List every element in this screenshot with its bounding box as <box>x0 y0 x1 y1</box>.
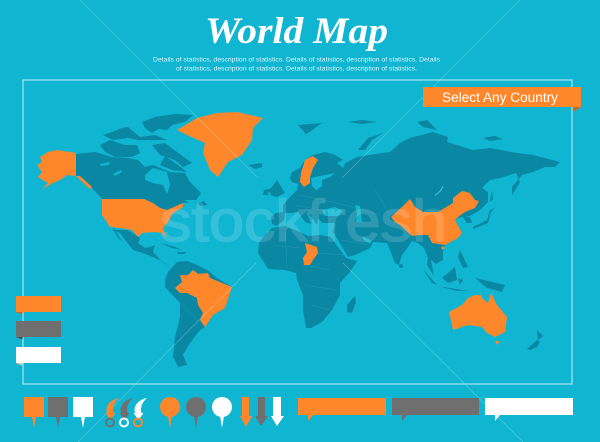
Lake Baikal <box>435 186 443 195</box>
Greenland <box>177 112 263 177</box>
Eurasian and Atlantic islands <box>248 120 503 229</box>
Madagascar <box>347 296 356 313</box>
Africa <box>258 226 357 328</box>
Tasmania <box>495 341 500 345</box>
Southeast Asian islands <box>399 250 505 292</box>
Hainan <box>442 246 444 250</box>
inland seas <box>100 162 372 244</box>
speech bars <box>298 398 573 421</box>
United States <box>102 199 183 238</box>
Mexico and Central America <box>113 230 170 266</box>
curved arrows with rings <box>106 398 147 426</box>
Australia <box>449 293 507 337</box>
square pins <box>24 397 93 428</box>
Chad <box>303 243 318 265</box>
map frame <box>23 80 572 384</box>
description text <box>153 56 441 72</box>
select country banner: Select Any Country <box>442 90 558 105</box>
Canadian arctic islands <box>100 114 207 206</box>
title: World Map <box>205 11 388 52</box>
Baja California <box>112 228 122 241</box>
select country banner <box>423 87 581 112</box>
description text: Details of statistics, description of statistics. Details of statistics, description of statistics. Details <box>153 56 441 64</box>
country borders <box>180 190 390 327</box>
description text: of statistics, description of statistics. Details of statistics, description of statistics. <box>176 66 417 72</box>
New Zealand <box>527 330 543 350</box>
watermark diagonal lines <box>78 0 523 442</box>
down arrows <box>240 397 284 427</box>
China <box>391 191 479 245</box>
South America <box>165 261 232 367</box>
highlighted countries <box>37 112 507 345</box>
Sweden <box>300 156 318 187</box>
Alaska <box>37 150 76 189</box>
Brazil <box>175 270 232 327</box>
legend swatches <box>16 296 61 366</box>
world map <box>76 114 560 367</box>
Alaska panhandle <box>76 176 92 189</box>
watermark: stockfresh <box>160 189 447 254</box>
Eurasia <box>271 132 560 276</box>
Canada <box>76 152 201 212</box>
round pins <box>160 397 232 428</box>
Caribbean islands <box>160 243 186 254</box>
